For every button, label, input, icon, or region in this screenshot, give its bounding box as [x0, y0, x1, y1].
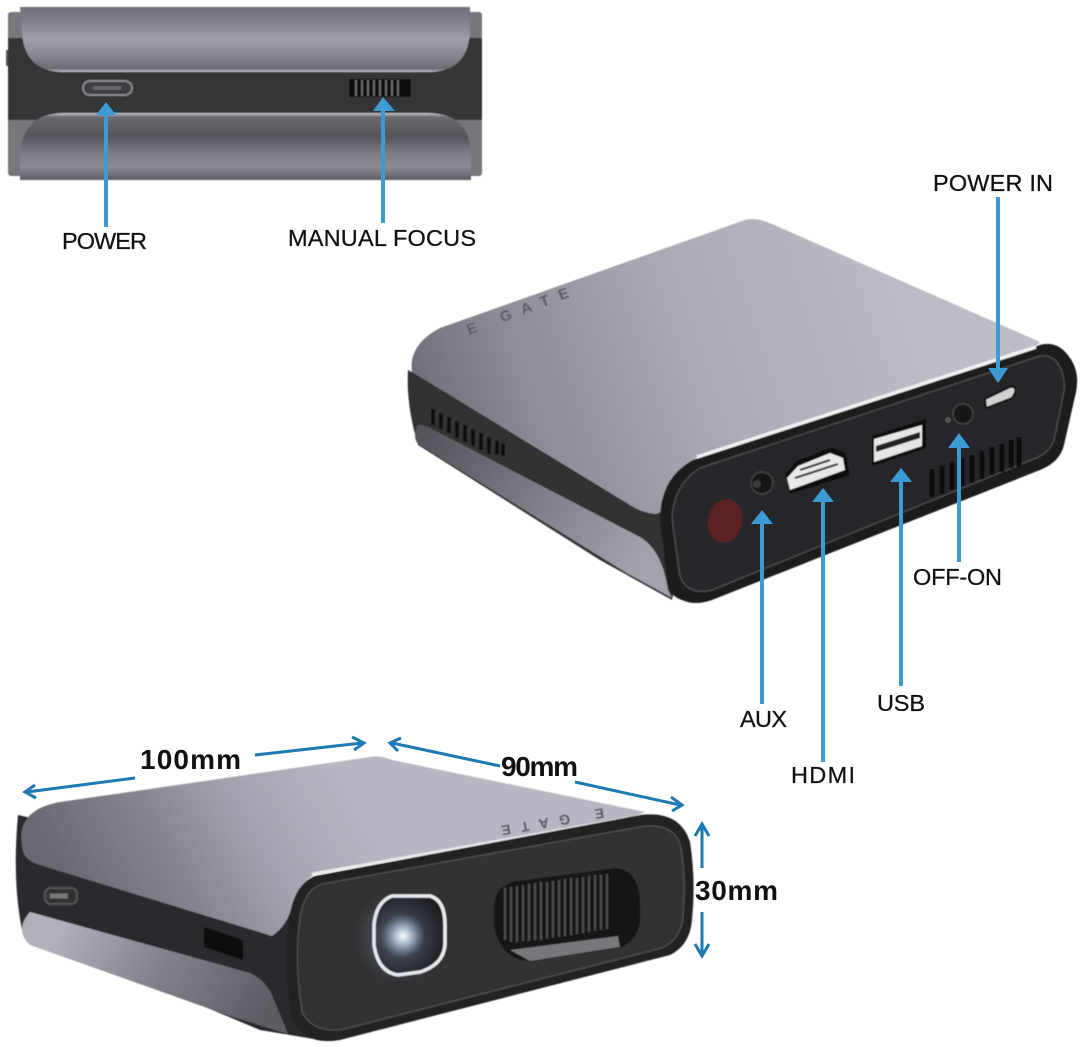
dark left side [408, 370, 690, 600]
dimension arrow: 30mm [695, 824, 709, 956]
logo text: E GATE [500, 805, 605, 839]
panel: front lens view of projector [16, 756, 694, 1041]
front panel inner [297, 826, 684, 1030]
power-in micro port [985, 387, 1015, 408]
front grille [494, 868, 640, 961]
label: power in: POWER IN [933, 170, 1053, 196]
label: power: POWER [62, 228, 147, 254]
front panel [286, 814, 694, 1041]
upper silver bar [20, 7, 470, 72]
dimension label: 100mm: 100mm [140, 744, 241, 775]
label: manual focus: MANUAL FOCUS [288, 225, 476, 251]
side vents [433, 409, 503, 456]
arrow: power in [988, 197, 1008, 383]
dimension label: 90mm: 90mm [501, 751, 578, 782]
label: off-on: OFF-ON [913, 564, 1002, 590]
power button [83, 81, 132, 95]
arrow: manual focus [373, 97, 395, 223]
dimension label: 30mm: 30mm [695, 875, 778, 906]
front panel [660, 344, 1077, 603]
upper silver surface [21, 756, 645, 936]
arrow: hdmi [812, 488, 834, 762]
manual focus wheel [349, 79, 411, 97]
silver highlight [312, 816, 640, 874]
front panel inner [672, 356, 1064, 591]
HDMI port [787, 449, 848, 492]
lower silver bar [20, 113, 471, 180]
arrow: off-on [948, 433, 970, 562]
dark centre band [8, 38, 482, 120]
lens [352, 889, 448, 985]
silver highlight [697, 347, 1036, 457]
panel: rear ports view of projector [408, 219, 1077, 603]
lower silver flange [415, 425, 672, 598]
arrow: aux [751, 510, 773, 704]
logo text: E GATE [464, 285, 571, 339]
dark left side [16, 815, 330, 1040]
label: hdmi: HDMI [791, 762, 855, 788]
AUX jack [751, 472, 773, 494]
panel: top edge view of projector [6, 7, 482, 180]
rear vents [932, 437, 1019, 497]
device end caps [6, 12, 482, 176]
top silver surface [412, 219, 1040, 514]
dimension arrow: 90mm [390, 738, 682, 811]
arrow: usb [890, 468, 912, 686]
label: aux: AUX [740, 706, 787, 732]
dimension arrow: 100mm [25, 737, 364, 798]
arrow: power [96, 102, 116, 227]
label: usb: USB [877, 690, 925, 716]
power switch [45, 888, 77, 904]
lower silver flange [22, 912, 288, 1034]
on-off switch [945, 404, 973, 424]
red IR window [704, 496, 746, 546]
USB port [872, 419, 926, 466]
focus wheel [204, 927, 243, 960]
